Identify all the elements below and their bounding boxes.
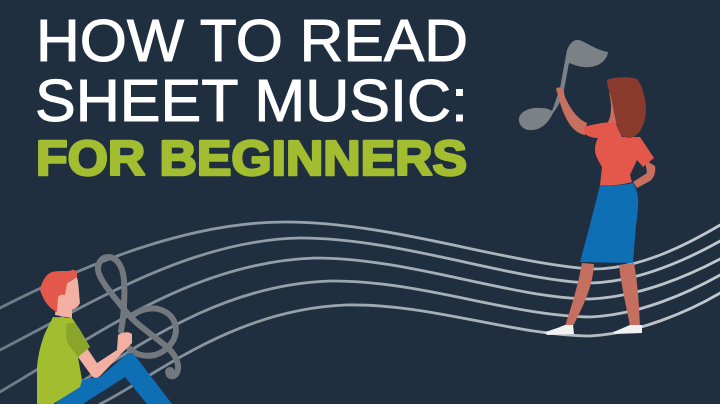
raised arm bbox=[556, 87, 587, 135]
red hair bbox=[40, 270, 77, 312]
left leg bbox=[565, 263, 594, 326]
icon: treble clef bbox=[98, 257, 178, 376]
boy holding treble clef bbox=[37, 257, 178, 404]
jeans bbox=[55, 353, 172, 404]
title line 3: FOR BEGINNERS bbox=[36, 132, 467, 186]
title line 1: HOW TO READ bbox=[36, 8, 468, 74]
right leg bbox=[619, 263, 640, 326]
title bbox=[35, 8, 468, 186]
arm on hip bbox=[633, 160, 655, 188]
coral top bbox=[584, 122, 654, 185]
music staff lines bbox=[0, 222, 720, 404]
icon: eighth note bbox=[519, 40, 608, 130]
neck and face bbox=[55, 277, 80, 318]
neck bbox=[607, 92, 619, 124]
green shirt bbox=[37, 317, 90, 404]
left shoe bbox=[545, 325, 574, 335]
title line 2: SHEET MUSIC: bbox=[35, 68, 468, 134]
sleeve shade bbox=[66, 323, 90, 357]
woman holding music note bbox=[519, 40, 655, 335]
blue skirt bbox=[580, 183, 638, 263]
back hair bbox=[607, 77, 646, 138]
arm bbox=[78, 332, 132, 378]
right shoe bbox=[613, 325, 642, 334]
